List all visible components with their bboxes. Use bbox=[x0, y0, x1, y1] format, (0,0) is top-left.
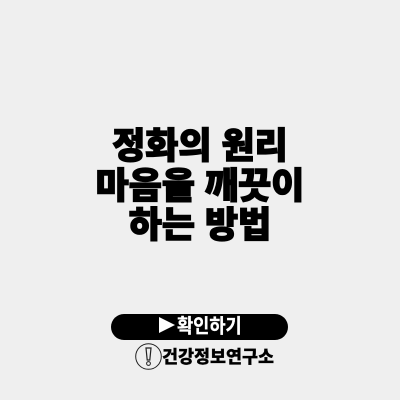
title: 마음을 깨끗이 bbox=[96, 165, 304, 206]
title bbox=[96, 125, 304, 245]
button label: 확인하기 bbox=[177, 315, 242, 337]
icon: exclamation circle bbox=[135, 343, 162, 370]
icon: play triangle bbox=[159, 317, 175, 333]
title: 하는 방법 bbox=[129, 204, 271, 245]
title: 정화의 원리 bbox=[112, 125, 288, 166]
button: confirm bbox=[111, 314, 288, 340]
brand name: 건강정보연구소 bbox=[162, 347, 274, 367]
